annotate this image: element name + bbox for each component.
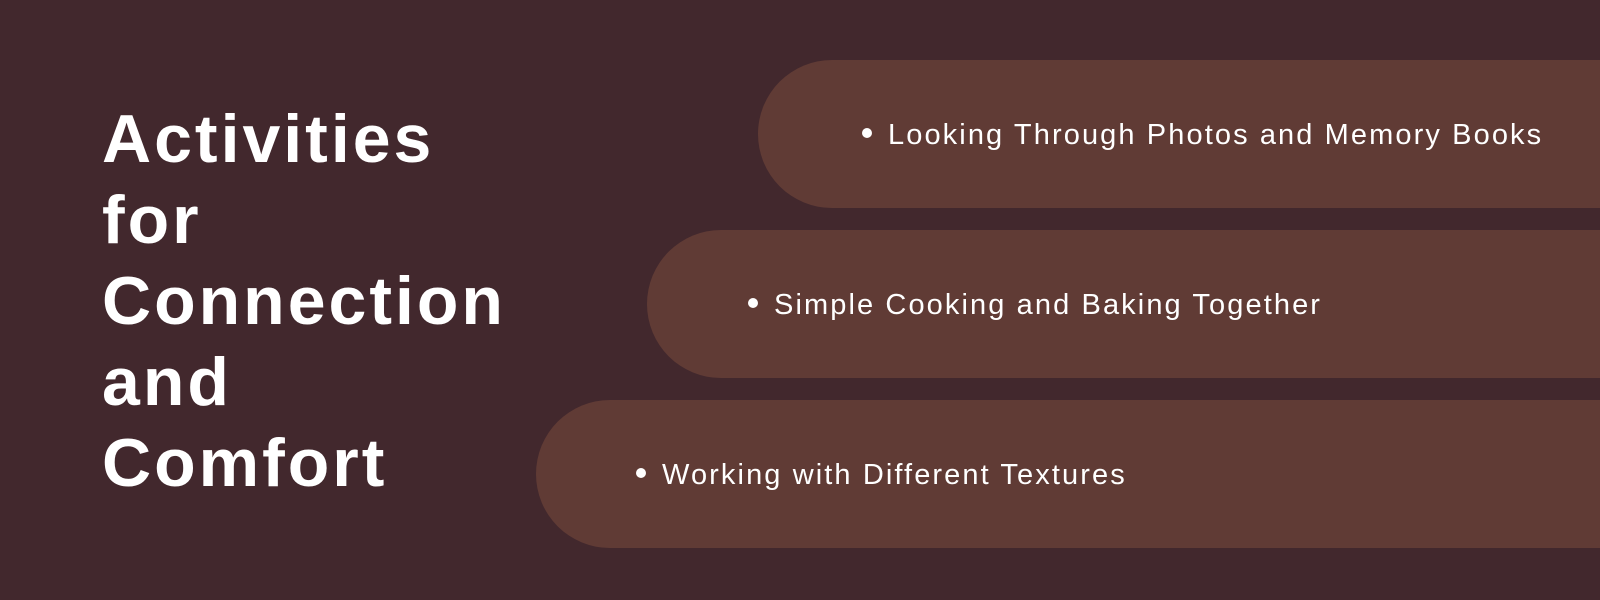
text: item 1: Looking Through Photos and Memory Books <box>888 119 1543 151</box>
title <box>102 101 506 501</box>
text: item 2: Simple Cooking and Baking Together <box>774 289 1322 321</box>
panel: pill 2 <box>647 230 1600 378</box>
title: Connection <box>102 263 506 339</box>
panel: pill 3 <box>536 400 1600 548</box>
title: Comfort <box>102 425 387 501</box>
title: Activities <box>102 101 434 177</box>
panel: pill 1 <box>758 60 1600 208</box>
title: for <box>102 182 202 258</box>
title: and <box>102 344 232 420</box>
text: item 3: Working with Different Textures <box>662 459 1127 491</box>
